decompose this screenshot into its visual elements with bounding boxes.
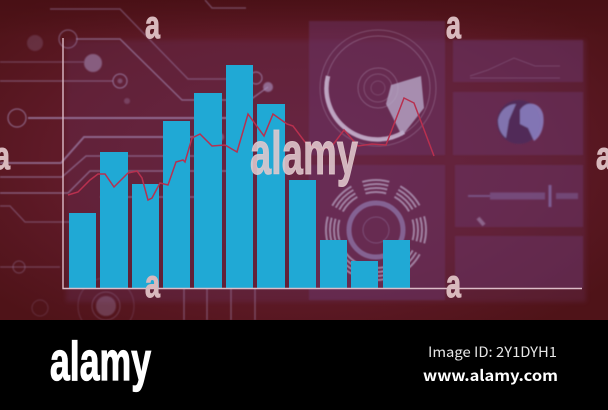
watermark: small letters: a xyxy=(446,263,461,306)
red trend line xyxy=(68,98,434,200)
globe icon xyxy=(497,100,544,144)
watermark: small letters xyxy=(0,4,608,306)
chart axes xyxy=(63,38,582,288)
image id: Image ID: 2Y1DYH1 xyxy=(428,342,557,362)
dashboard panels xyxy=(309,21,583,300)
watermark: small letters: a xyxy=(145,263,160,306)
website url: www.alamy.com xyxy=(423,365,558,386)
bar chart xyxy=(69,65,410,288)
radar dial xyxy=(320,30,436,146)
watermark: small letters: a xyxy=(145,4,160,47)
watermark: small letters: a xyxy=(446,4,461,47)
footer logo: alamy xyxy=(50,330,151,392)
background xyxy=(0,0,608,320)
circuit nodes xyxy=(27,35,273,316)
sound wave panel xyxy=(468,185,578,225)
gear dial xyxy=(314,168,438,292)
mini line chart panel xyxy=(470,58,560,78)
circuit board lines xyxy=(0,0,268,334)
footer bar xyxy=(0,320,608,410)
watermark: alamy center: alamy xyxy=(250,120,358,187)
